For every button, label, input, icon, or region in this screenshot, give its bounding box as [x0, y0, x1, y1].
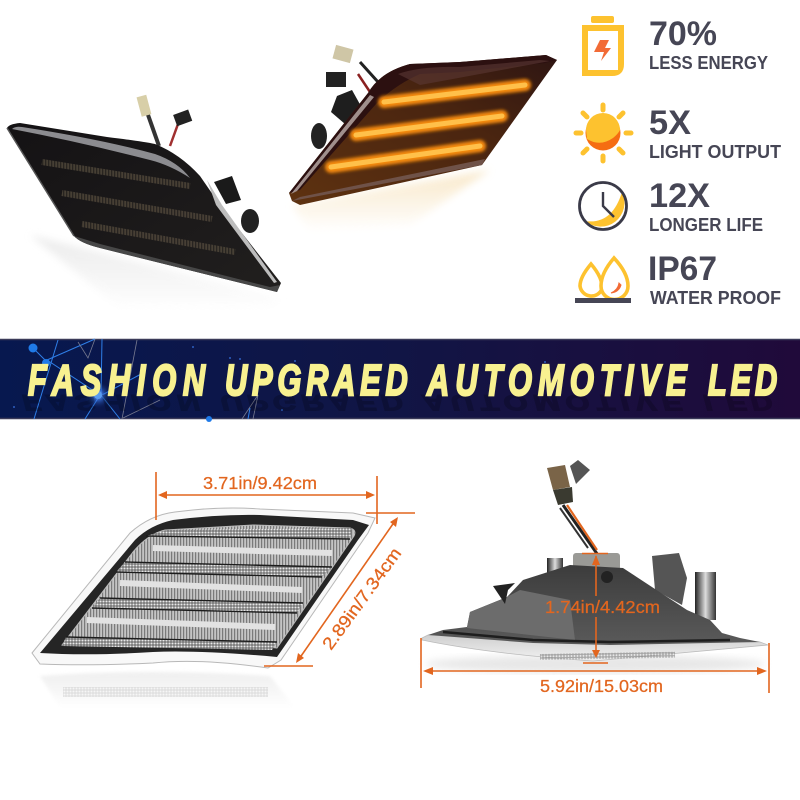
product photo: amber lamp lit [289, 45, 557, 232]
feature: water proof: WATER PROOF [650, 288, 781, 308]
feature: longer life: LONGER LIFE [649, 215, 763, 235]
dimension: length [421, 638, 769, 696]
feature: longer life: 12X [649, 177, 710, 215]
clear lamp [32, 508, 375, 668]
lamp reflection [40, 672, 295, 708]
banner [0, 339, 800, 422]
banner reflection [22, 390, 772, 415]
feature: water proof: IP67 [648, 250, 717, 288]
dimension: width: 3.71in/9.42cm [203, 473, 317, 493]
dimension: length: 5.92in/15.03cm [540, 676, 663, 696]
lamp housing [422, 553, 768, 661]
feature: less energy [582, 15, 768, 76]
feature: water proof [575, 250, 781, 308]
banner reflection: LED [703, 390, 772, 415]
banner title: UPGRAED [225, 357, 408, 405]
lamp shadow [425, 655, 765, 673]
honeycomb bands [62, 528, 352, 650]
banner reflection: UPGRAED [220, 390, 403, 415]
feature: light output: LIGHT OUTPUT [649, 142, 781, 162]
product photo: clear lamp front with dimensions [32, 472, 415, 708]
banner title: FASHION [28, 357, 206, 405]
product photo: lamp back side with dimensions [421, 460, 769, 696]
feature: light output [576, 104, 781, 162]
banner reflection: AUTOMOTIVE [421, 390, 683, 415]
feature: less energy: 70% [649, 15, 717, 53]
dimension: height [264, 513, 415, 666]
icon: battery [582, 16, 624, 76]
feature: less energy: LESS ENERGY [649, 53, 768, 73]
dimension: height: 2.89in/7.34cm [318, 544, 405, 653]
dimension: depth [545, 554, 660, 663]
product photo: smoked lamp off [7, 95, 281, 310]
feature: longer life [580, 177, 763, 235]
wiring connector [547, 460, 607, 575]
lens [422, 635, 768, 661]
icon: water drops [575, 258, 631, 303]
dimension: depth: 1.74in/4.42cm [545, 597, 660, 617]
banner reflection: FASHION [22, 390, 200, 415]
banner title: LED [708, 357, 777, 405]
banner title: AUTOMOTIVE [426, 357, 688, 405]
icon: sun [576, 105, 631, 161]
feature: light output: 5X [649, 104, 691, 142]
body [428, 565, 760, 645]
dimension: width [156, 472, 377, 524]
banner title [28, 357, 777, 405]
icon: clock [580, 182, 626, 230]
